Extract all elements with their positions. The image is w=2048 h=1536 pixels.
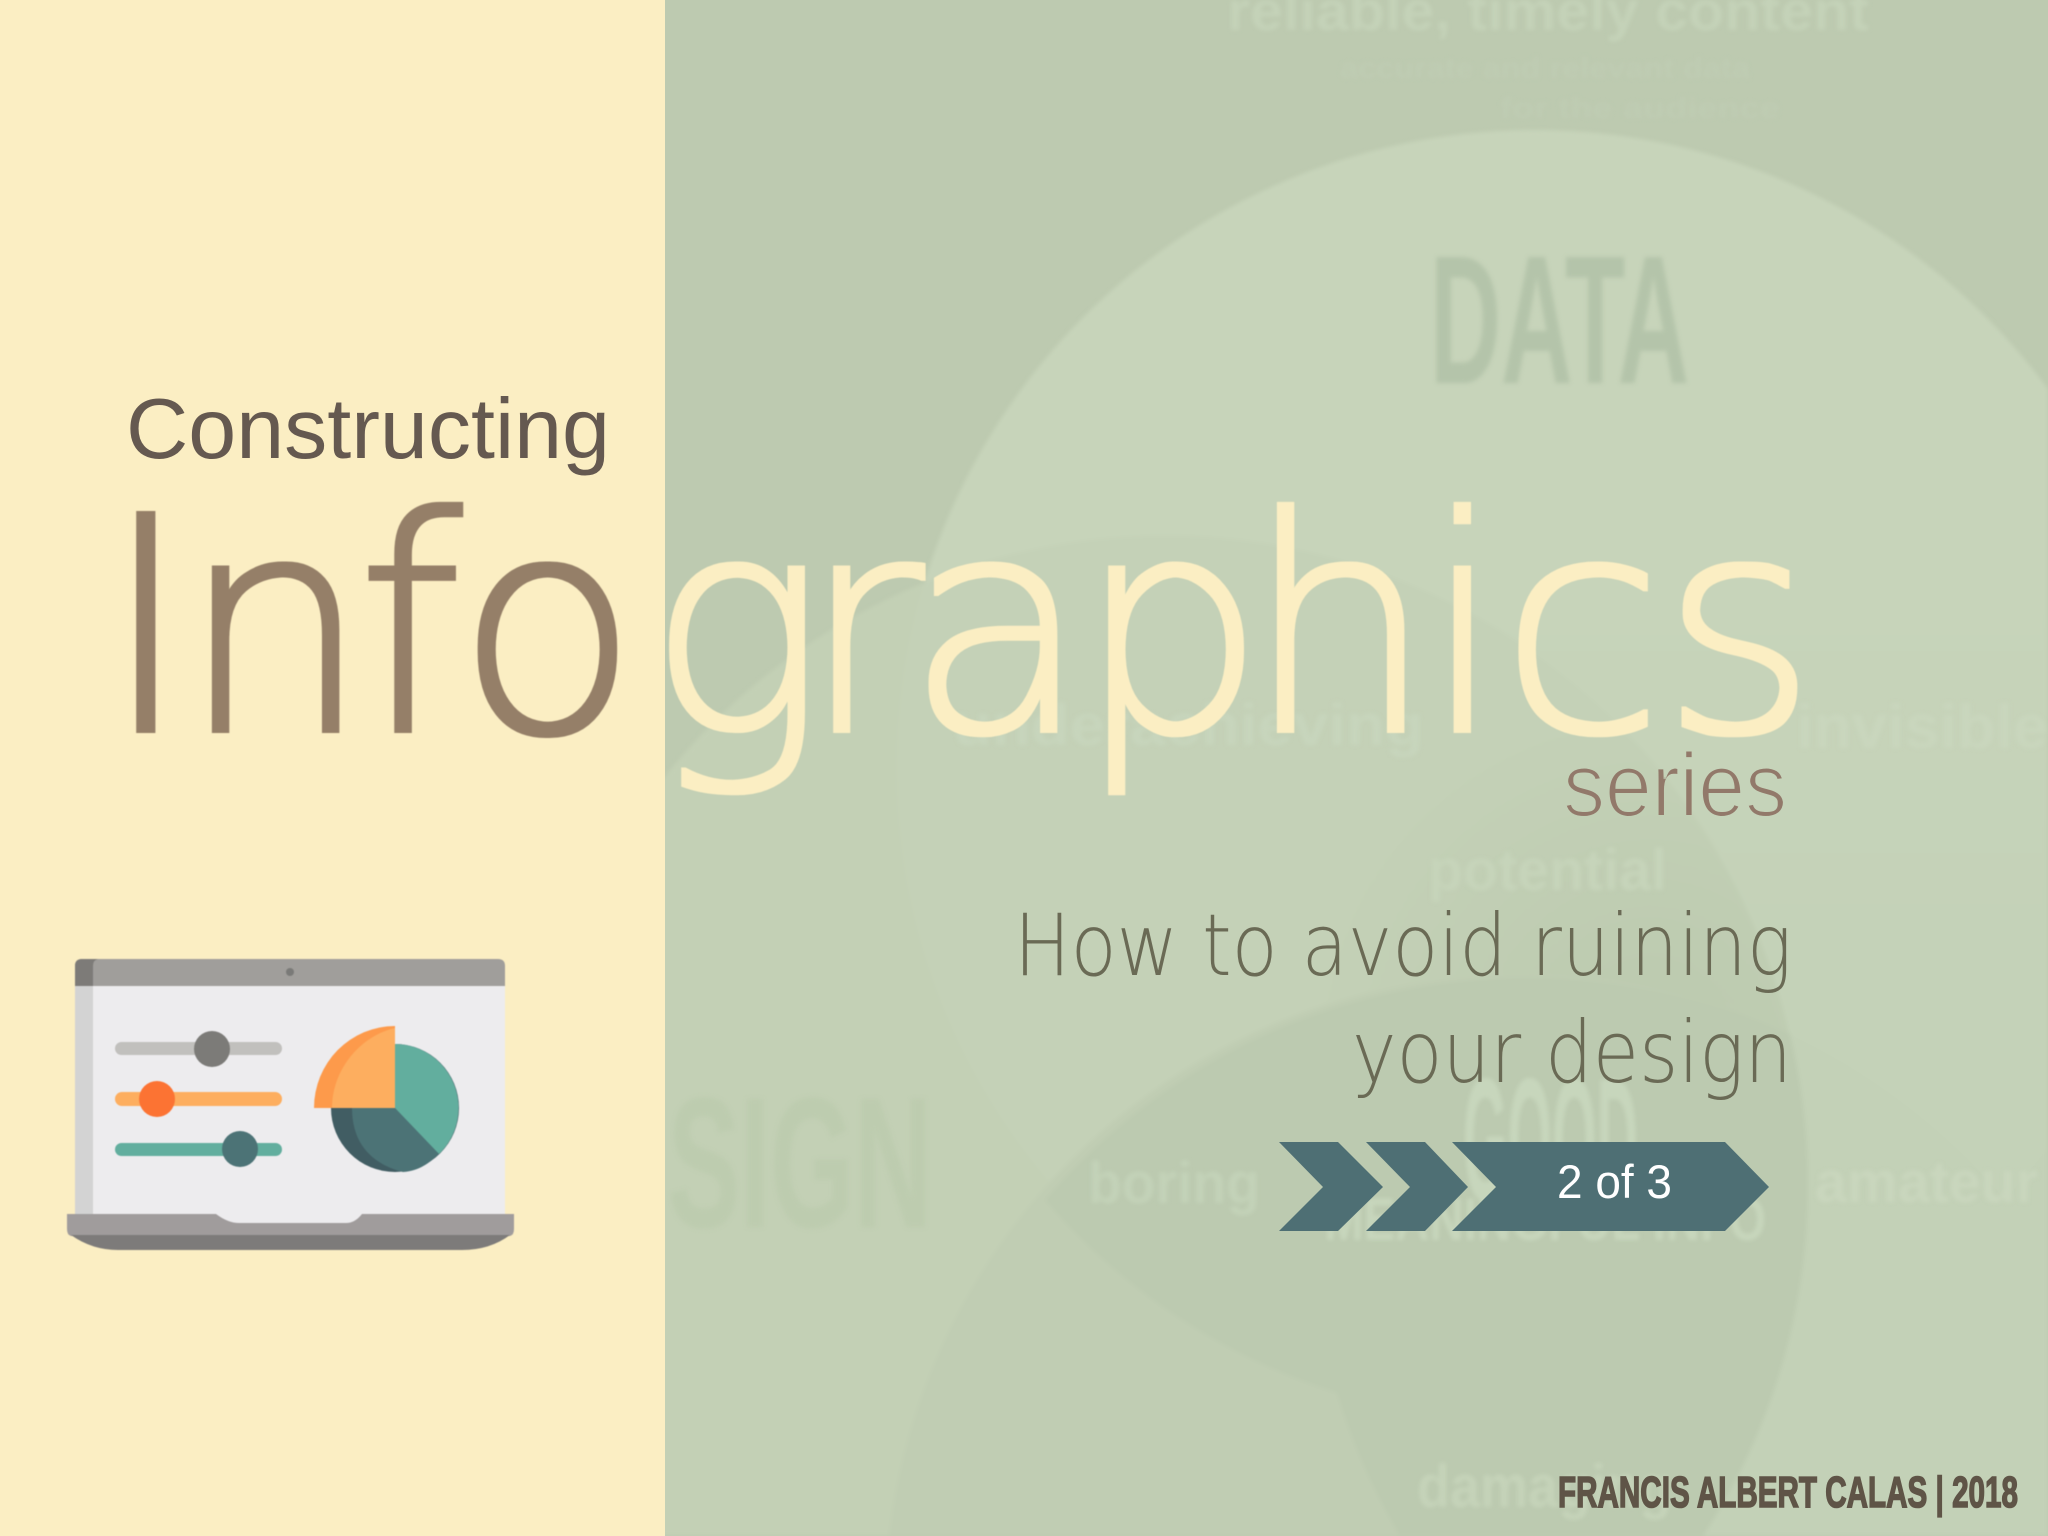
ghost background words of the venn diagram: for the audience [1500, 92, 1780, 125]
label: progress: 2 of 3 [1557, 1155, 1672, 1208]
subtitle: How to avoid ruining your design [1014, 896, 1792, 1103]
left cream panel [0, 0, 665, 1536]
ghost background words of the venn diagram [668, 0, 2048, 1520]
title: Infographics [102, 453, 1817, 802]
ghost background words of the venn diagram: invisible [1796, 693, 2048, 762]
slider: orange [115, 1081, 282, 1117]
laptop camera [286, 968, 294, 976]
pie chart [314, 1026, 459, 1172]
laptop lid bar [75, 959, 505, 986]
ghost background words of the venn diagram: potential [1428, 838, 1667, 903]
subtitle: How to avoid ruining your design: your design [1352, 1003, 1792, 1103]
background: overlapping venn circles [927, 132, 2046, 1152]
ghost background words of the venn diagram: damaging [1417, 1453, 1672, 1520]
title: Constructing: Constructing [126, 382, 610, 477]
laptop screen [75, 986, 505, 1226]
slider: green [115, 1131, 282, 1167]
ghost background words of the venn diagram: boring [1088, 1151, 1260, 1216]
icon: laptop with sliders and pie chart [67, 959, 514, 1250]
subtitle: How to avoid ruining your design: How to avoid ruining [1014, 896, 1792, 996]
background: sage panel [665, 0, 2048, 1536]
title part: graphics: graphics [647, 453, 1817, 802]
ghost background words of the venn diagram: SIGN [668, 1060, 932, 1267]
arrow: first chevron [1279, 1142, 1383, 1231]
ghost background words of the venn diagram: DATA [1430, 217, 1689, 422]
title part: Info: Info [102, 453, 639, 802]
subtitle: series: series [1563, 736, 1787, 836]
slider: gray [115, 1031, 282, 1067]
ghost background words of the venn diagram: amateur [1815, 1150, 2038, 1215]
ghost background words of the venn diagram: accurate and relevant data [1340, 52, 1750, 85]
ghost background words of the venn diagram: GOOD [1463, 1043, 1638, 1238]
arrow: third chevron [1452, 1142, 1769, 1231]
ghost background words of the venn diagram: underachieving [953, 693, 1424, 758]
chevron banner: 2 of 3 [1279, 1142, 1769, 1231]
ghost background words of the venn diagram: MEANINGFUL INFO [1324, 1186, 1766, 1253]
laptop base [67, 1214, 514, 1236]
arrow: second chevron [1366, 1142, 1468, 1231]
